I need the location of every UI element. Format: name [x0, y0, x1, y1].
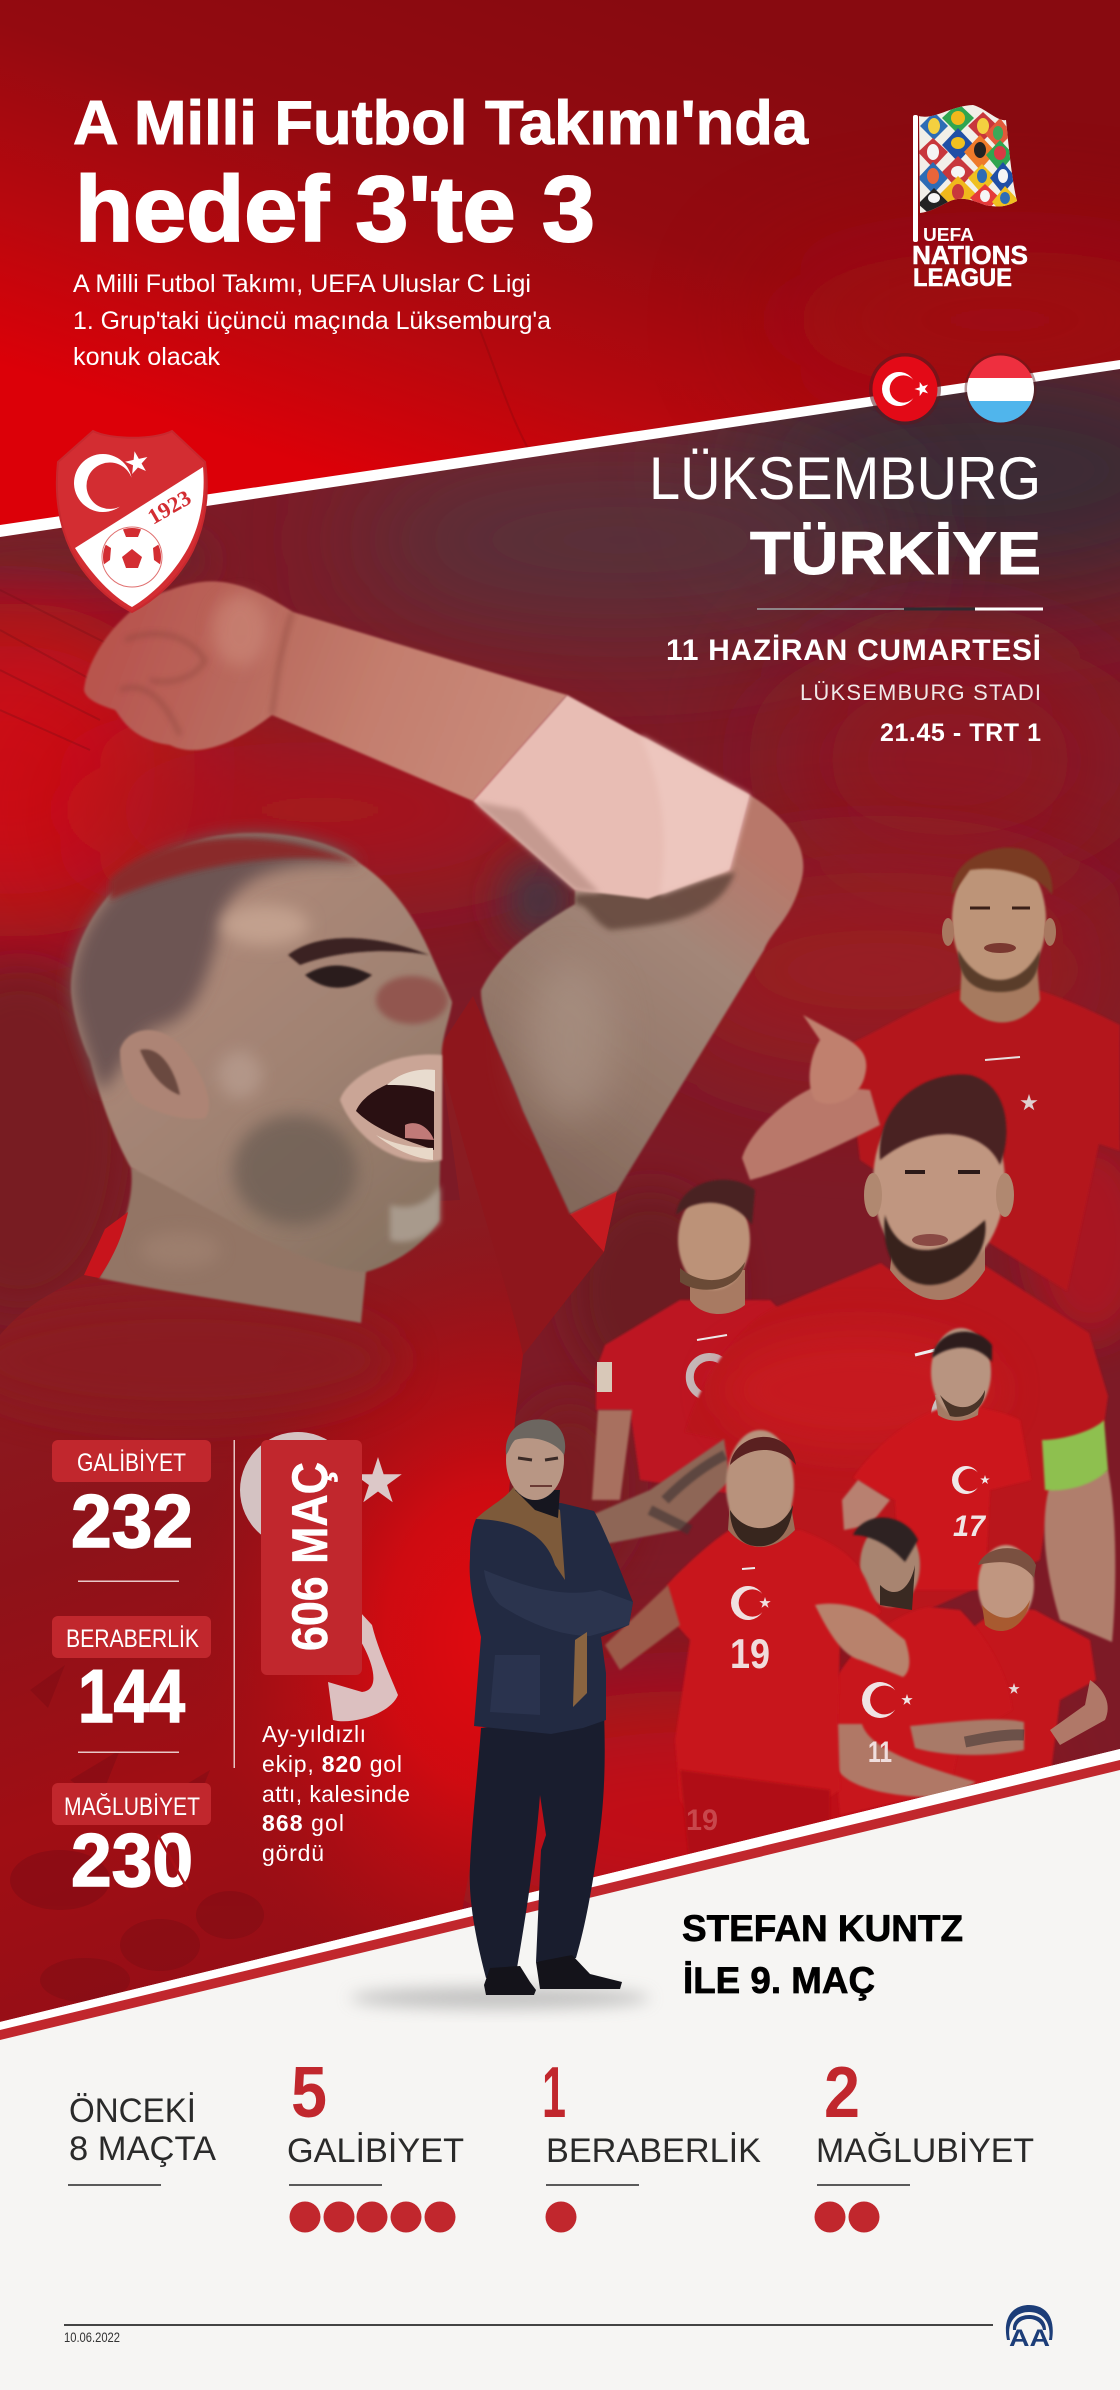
icon: Luxembourg flag	[964, 353, 1037, 425]
stat: mağlubiyet	[52, 1783, 211, 1902]
logo wordmark	[912, 225, 1028, 292]
crest year: 1923	[143, 485, 195, 529]
coach floor shadow	[350, 1987, 650, 2009]
coach head	[506, 1419, 565, 1500]
text block: goals: 868 gol	[262, 1810, 344, 1836]
logo: Anadolu Agency	[1006, 2305, 1053, 2352]
background players cluster	[592, 848, 1120, 1870]
top red header background	[0, 0, 1120, 540]
match date: 11 HAZİRAN CUMARTESİ	[666, 634, 1041, 667]
coach: Stefan Kuntz	[470, 1419, 633, 1995]
coach scarf	[476, 1485, 565, 1580]
heading: Stefan Kuntz	[682, 1908, 963, 2001]
heading: Stefan Kuntz: STEFAN KUNTZ	[682, 1908, 963, 1949]
stat: 1 draw: 1	[542, 2053, 566, 2133]
panel: previous 8 matches	[68, 2053, 1034, 2232]
stat: mağlubiyet: MAĞLUBİYET	[64, 1792, 200, 1821]
stat: 5 wins: GALİBİYET	[287, 2132, 464, 2170]
stat: 2 losses	[814, 2053, 1034, 2232]
header description: A Milli Futbol Takımı, UEFA Uluslar C Ligi	[73, 270, 531, 298]
text block: goals: gördü	[262, 1840, 324, 1866]
team: Türkiye: TÜRKİYE	[750, 520, 1041, 587]
icon: Turkish flag	[869, 353, 941, 425]
header description	[73, 270, 551, 371]
match time and channel: 21.45 - TRT 1	[880, 719, 1041, 747]
player: number 17: 17	[953, 1510, 986, 1543]
stat: 5 wins	[287, 2053, 464, 2232]
panel: all-time record	[52, 1440, 211, 1902]
player head	[71, 833, 452, 1272]
arm bandage	[473, 695, 750, 899]
divider with accent	[757, 608, 1043, 610]
stat: 2 losses: MAĞLUBİYET	[816, 2132, 1034, 2170]
logo: Anadolu Agency: AA	[1009, 2325, 1050, 2352]
icon: flag pole	[913, 115, 918, 242]
player: number 19	[605, 1430, 909, 1870]
player hair	[71, 833, 361, 1090]
stat: beraberlik	[52, 1616, 211, 1738]
team: Lüksemburg: LÜKSEMBURG	[649, 445, 1041, 512]
stat: mağlubiyet: 230	[71, 1818, 193, 1902]
stat: galibiyet: 232	[71, 1479, 193, 1563]
forearm and fist	[84, 581, 567, 801]
top diagonal white band	[0, 360, 1120, 537]
footer rule	[64, 2324, 993, 2326]
crest football	[102, 527, 162, 590]
stat: galibiyet: GALİBİYET	[77, 1448, 186, 1477]
text block: goals: attı, kalesinde	[262, 1781, 410, 1807]
logo: Turkish Football Federation crest	[57, 431, 207, 612]
header description: 1. Grup'taki üçüncü maçında Lüksemburg'a	[73, 307, 551, 335]
raised upper arm	[481, 795, 803, 1214]
stat: 5 wins: 5	[291, 2053, 327, 2133]
logo: UEFA Nations League	[912, 100, 1028, 292]
logo wordmark: LEAGUE	[913, 264, 1012, 292]
coach shoes	[484, 1955, 622, 1995]
player: top	[742, 848, 1120, 1291]
match venue: LÜKSEMBURG STADI	[800, 680, 1041, 705]
bottom white section	[0, 1749, 1120, 2390]
logo wordmark: UEFA	[923, 225, 974, 245]
title line one: A Milli Futbol Takımı'nda	[73, 89, 809, 158]
stat: 2 losses: 2	[824, 2053, 860, 2133]
icon: colourful flag	[919, 105, 1017, 213]
header title	[73, 89, 809, 261]
stat: galibiyet	[52, 1440, 211, 1563]
player: number 19: 19	[686, 1804, 718, 1837]
text block: goals: ekip, 820 gol	[262, 1751, 402, 1777]
player shirt	[0, 990, 640, 2050]
logo wordmark: NATIONS	[912, 240, 1028, 270]
stat: 1 draw: BERABERLİK	[546, 2132, 761, 2170]
callout: 606 matches	[261, 1440, 362, 1675]
coach jacket	[470, 1503, 633, 1734]
main player photo: Merih Demiral	[0, 581, 803, 2050]
label: previous 8 matches: ÖNCEKİ	[69, 2092, 196, 2130]
footer date: 10.06.2022	[64, 2330, 120, 2345]
stat: 1 draw	[542, 2053, 761, 2232]
face details	[120, 905, 448, 1242]
player neck	[99, 1168, 366, 1323]
text block: goals: Ay-yıldızlı	[262, 1721, 366, 1747]
vertical divider	[234, 1440, 235, 1768]
stat: beraberlik: BERABERLİK	[66, 1624, 199, 1653]
player: number 11: 11	[868, 1736, 892, 1769]
label: previous 8 matches	[68, 2092, 216, 2186]
white stripe at section edge	[0, 1749, 1120, 2030]
red diagonal stripe	[0, 1760, 1120, 2040]
coach trousers	[470, 1712, 605, 1978]
text block: goals	[262, 1721, 410, 1866]
header description: konuk olacak	[73, 343, 220, 371]
title line two: hedef 3'te 3	[75, 157, 595, 261]
lower photo background	[0, 340, 1120, 2040]
shirt crescent emblem	[240, 1432, 402, 1721]
label: previous 8 matches: 8 MAÇTA	[69, 2130, 216, 2168]
player: number 11	[828, 1518, 1024, 1815]
heading: Stefan Kuntz: İLE 9. MAÇ	[683, 1960, 875, 2001]
player: number 17	[842, 1328, 1031, 1590]
player: number 19: 19	[730, 1630, 770, 1677]
stat: beraberlik: 144	[78, 1654, 185, 1738]
callout: 606 matches: 606 MAÇ	[282, 1462, 338, 1651]
coach neck	[515, 1490, 560, 1518]
player: captain	[592, 1074, 1115, 1642]
player: left	[592, 1180, 790, 1500]
match panel	[649, 445, 1043, 747]
player: number 7 right	[950, 1545, 1108, 1790]
